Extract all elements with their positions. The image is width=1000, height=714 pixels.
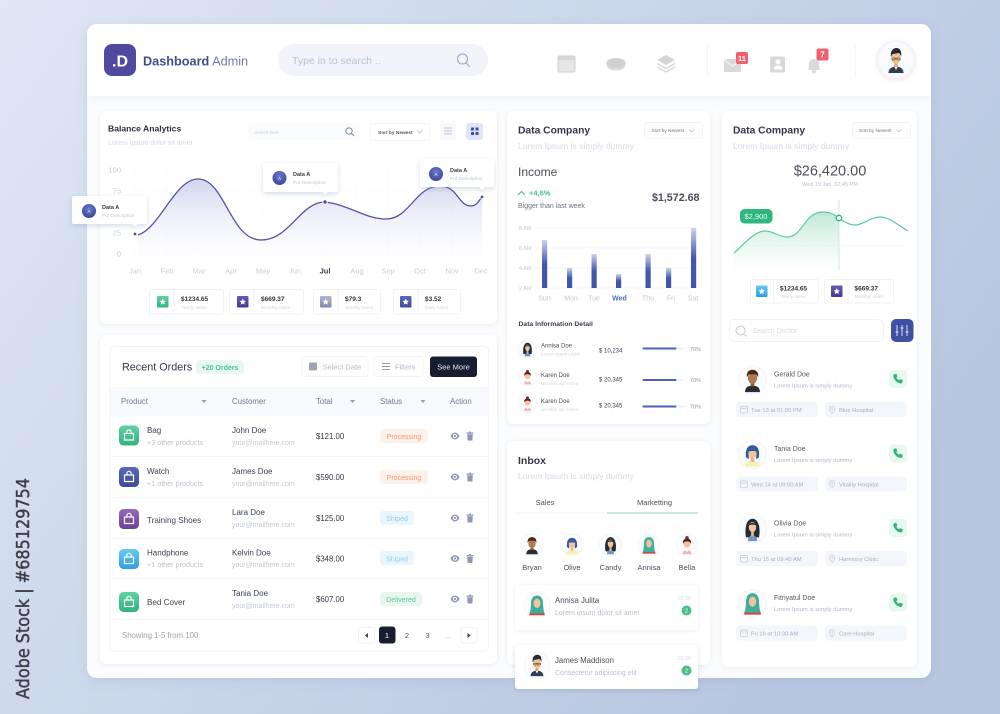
contact: Olive: Olive bbox=[563, 563, 581, 572]
x axis labels: Oct bbox=[414, 266, 427, 276]
tooltip: middle bbox=[263, 163, 338, 195]
icon: contact bbox=[770, 56, 785, 72]
bar chart: Tue bbox=[588, 296, 600, 302]
search bar: Type in to search .. bbox=[292, 55, 381, 67]
message: Annisa Julita: Lorem ipsum dolor sit amet bbox=[555, 610, 639, 617]
icon: mail with badge bbox=[724, 52, 748, 72]
green line chart bbox=[734, 200, 908, 270]
total amount: $26,420.00 bbox=[794, 164, 866, 180]
bar chart: Mon bbox=[564, 296, 578, 302]
table header: Product bbox=[121, 397, 149, 406]
contact: Candy: Candy bbox=[600, 563, 622, 572]
y axis labels: 25 bbox=[113, 228, 121, 238]
x axis labels: Feb bbox=[161, 266, 173, 276]
message: James Maddison: Consectetur adipiscing elit bbox=[555, 670, 637, 677]
income amount: $1,572.68 bbox=[652, 192, 700, 204]
doctor: Fitriyatul Doe bbox=[736, 590, 907, 640]
x axis labels: Aug bbox=[350, 266, 364, 276]
doctor: Fitriyatul Doe: Fitriyatul Doe bbox=[774, 595, 815, 602]
panel: income bbox=[507, 111, 710, 424]
doctor: Tania Doe: Lorem Ipsum is simply dummy bbox=[774, 458, 852, 464]
orders badge bbox=[196, 360, 244, 374]
stat chip: monthly sales: $669.37 bbox=[854, 286, 878, 292]
growth figure bbox=[518, 188, 551, 198]
row: bag: Processing bbox=[387, 434, 421, 441]
doctor: Gerald Doe: Tue 13 at 01:00 PM bbox=[751, 408, 802, 414]
logo: .D bbox=[112, 54, 128, 70]
row: training shoes: $125.00 bbox=[316, 514, 345, 523]
sort dropdown bbox=[370, 124, 430, 140]
row: watch bbox=[119, 467, 474, 488]
search bar bbox=[278, 44, 488, 76]
income label: Income bbox=[518, 165, 558, 179]
select date button: Select Date bbox=[322, 362, 361, 372]
x axis labels: Sep bbox=[381, 266, 395, 276]
y axis labels bbox=[108, 166, 121, 258]
message: Annisa Julita: 10:30 bbox=[677, 596, 691, 602]
doctor: Gerald Doe: Lorem Ipsum is simply dummy bbox=[774, 384, 852, 390]
user avatar bbox=[877, 41, 915, 79]
contact: Bryan bbox=[521, 534, 543, 572]
heading: Data Company bbox=[733, 126, 805, 136]
stat chip: weekly sales bbox=[314, 290, 380, 314]
detail row: Karen Doe second: $ 20,345 bbox=[599, 404, 623, 410]
doctor search: Search Doctor bbox=[752, 328, 798, 335]
icon: mail with badge: 11 bbox=[738, 54, 746, 63]
icon: bell with badge: 7 bbox=[820, 50, 825, 60]
doctor: Gerald Doe: Blue Hospital bbox=[839, 408, 873, 414]
contact: Annisa bbox=[638, 534, 661, 572]
tooltip: left bbox=[72, 196, 147, 227]
subheading: Lorem Ipsum is simply dummy bbox=[518, 141, 635, 151]
y axis labels: 100 bbox=[108, 166, 121, 174]
x axis labels: Nov bbox=[445, 266, 459, 276]
detail row: Karen Doe second: 70% bbox=[690, 404, 701, 410]
row: watch: $590.00 bbox=[316, 473, 345, 482]
row: training shoes bbox=[119, 508, 474, 529]
doctor: Gerald Doe bbox=[736, 366, 907, 417]
doctor: Tania Doe: Vitality Hospital bbox=[839, 482, 879, 488]
bar chart: 4 AM bbox=[519, 266, 532, 272]
row: bed cover: Bed Cover bbox=[147, 598, 186, 607]
row: handphone: Kelvin Doe bbox=[232, 548, 271, 558]
tabs: Sales bbox=[536, 498, 555, 507]
message: James Maddison: 10:30 bbox=[677, 656, 691, 662]
doctor: Tania Doe: Wed 14 at 09:00 AM bbox=[751, 482, 804, 488]
filters button bbox=[374, 356, 423, 376]
icon: layers bbox=[657, 55, 675, 72]
see more button: See More bbox=[437, 362, 470, 372]
tooltip: middle: Put Description bbox=[293, 180, 326, 186]
row: training shoes: your@mailhere.com bbox=[232, 522, 295, 529]
bar chart: Sat bbox=[688, 296, 698, 302]
doctor: Olivia Doe: Lorem Ipsum is simply dummy bbox=[774, 532, 852, 538]
stat chip: yearly sales: $1234.65 bbox=[181, 296, 208, 303]
pagination: 3 bbox=[425, 631, 430, 640]
x axis labels: Dec bbox=[474, 266, 488, 276]
bar chart: Thu bbox=[642, 296, 654, 302]
heading: Recent Orders bbox=[122, 362, 193, 374]
subheading: Lorem Ipsum is simply dummy bbox=[733, 141, 850, 151]
x axis labels: Jan bbox=[129, 266, 141, 276]
row: training shoes: Training Shoes bbox=[147, 516, 201, 525]
panel: inbox bbox=[507, 441, 710, 689]
y axis labels: 0 bbox=[117, 250, 121, 258]
see more button bbox=[430, 356, 477, 377]
row: handphone: Shiped bbox=[386, 556, 408, 564]
contact: Bella bbox=[676, 534, 698, 572]
row: handphone: $348.00 bbox=[316, 554, 345, 564]
search field: Search here... bbox=[254, 130, 282, 135]
logo bbox=[104, 44, 136, 76]
x axis labels: Apr bbox=[225, 266, 237, 276]
doctor: Tania Doe: Tania Doe bbox=[774, 446, 806, 453]
message: James Maddison: 2 bbox=[685, 668, 688, 674]
header bar bbox=[87, 24, 931, 96]
doctor: Tania Doe bbox=[736, 440, 907, 492]
tabs bbox=[515, 498, 698, 513]
filter button bbox=[891, 319, 914, 342]
contact: Bella: Bella bbox=[679, 563, 696, 572]
tooltip: left: Put Description bbox=[102, 213, 135, 219]
table header bbox=[110, 387, 488, 416]
sort dropdown bbox=[644, 122, 702, 138]
doctor: Fitriyatul Doe: Care Hospital bbox=[839, 632, 874, 638]
contact: Annisa: Annisa bbox=[638, 563, 661, 572]
stat chip: weekly sales: Weekly sales bbox=[345, 305, 374, 311]
comparison note: Bigger than last week bbox=[518, 203, 585, 210]
x axis labels bbox=[129, 266, 488, 276]
bar chart: Fri bbox=[667, 296, 676, 302]
search field bbox=[248, 123, 360, 140]
y axis labels: 75 bbox=[113, 186, 121, 196]
contact: Bryan: Bryan bbox=[522, 563, 542, 572]
list view toggle bbox=[440, 123, 456, 140]
panel: balance analytics bbox=[72, 111, 497, 324]
stat chip: monthly sales: Monthly sales bbox=[854, 294, 884, 300]
row: training shoes: Shiped bbox=[386, 516, 408, 523]
row: bed cover bbox=[119, 589, 474, 612]
row: handphone: +1 other products bbox=[147, 560, 204, 569]
detail row: Karen Doe second: Ut enim ad minim bbox=[541, 407, 578, 413]
stat chip: monthly sales bbox=[230, 290, 304, 314]
table header: Total bbox=[316, 397, 333, 406]
stat chip: yearly sales bbox=[150, 290, 224, 314]
area fill bbox=[138, 179, 482, 256]
message: Annisa Julita: Annisa Julita bbox=[555, 596, 600, 605]
x axis labels: May bbox=[256, 266, 270, 276]
doctor: Olivia Doe: Thu 15 at 09:40 AM bbox=[751, 557, 802, 563]
tooltip: middle: Data A bbox=[293, 172, 310, 178]
detail row: Karen Doe second bbox=[518, 394, 701, 413]
detail row: Annisa Doe: Lorem ipsum dolor bbox=[541, 352, 581, 358]
row: handphone: Handphone bbox=[147, 548, 189, 558]
stat chip: monthly sales: Monthly sales bbox=[261, 305, 291, 311]
value tag bbox=[740, 209, 772, 224]
filters button: Filters bbox=[395, 362, 416, 372]
stat chip: monthly sales bbox=[824, 280, 894, 303]
doctor search bbox=[730, 320, 884, 342]
detail row: Karen Doe: Ut enim ad minim bbox=[541, 381, 578, 387]
orders badge: +20 Orders bbox=[202, 365, 238, 372]
row: bed cover: your@mailhere.com bbox=[232, 603, 295, 610]
contact: Olive bbox=[561, 534, 583, 572]
tooltip: right bbox=[420, 159, 494, 190]
detail row: Karen Doe bbox=[518, 368, 701, 387]
detail heading: Data Information Detail bbox=[518, 321, 593, 328]
data points bbox=[133, 195, 484, 236]
row: watch: +1 other products bbox=[147, 479, 204, 488]
sort dropdown: Sort by Newest bbox=[859, 128, 892, 134]
heading: Inbox bbox=[518, 455, 546, 467]
detail row: Karen Doe: 70% bbox=[690, 378, 701, 384]
detail row: Karen Doe: Karen Doe bbox=[541, 373, 570, 379]
doctor: Fitriyatul Doe: Fri 16 at 10:30 AM bbox=[751, 632, 799, 638]
tabs: Marketting bbox=[637, 498, 672, 507]
bar chart bbox=[519, 226, 698, 302]
row: bag: $121.00 bbox=[316, 432, 345, 441]
doctor: Olivia Doe: Harmony Clinic bbox=[839, 557, 878, 563]
tooltip: right: A bbox=[434, 172, 438, 177]
row: bed cover: Delivered bbox=[386, 597, 416, 604]
tooltip: middle: A bbox=[278, 176, 281, 181]
row: handphone bbox=[119, 548, 474, 569]
stat chip: yearly sales: $1234.65 bbox=[780, 286, 807, 292]
x axis labels: Jun bbox=[289, 266, 301, 276]
table header: Action bbox=[450, 397, 472, 406]
bar chart: Wed bbox=[612, 296, 627, 302]
stat chip: daily sales bbox=[394, 290, 460, 314]
pagination: 1 bbox=[385, 631, 389, 640]
sort dropdown: Sort by Newest bbox=[652, 128, 685, 134]
side credit text: Adobe Stock | #685129754 bbox=[14, 478, 34, 699]
select date button bbox=[302, 356, 368, 376]
heading: Data Company bbox=[518, 126, 590, 136]
stat chip: weekly sales: $79.3 bbox=[345, 296, 362, 303]
bar chart: 8 AM bbox=[519, 226, 532, 232]
table header: Status bbox=[380, 397, 402, 406]
table footer text: Showing 1-5 from 100 bbox=[122, 631, 199, 640]
row: handphone: your@mailhere.com bbox=[232, 562, 295, 569]
bar chart: 6 AM bbox=[519, 246, 532, 252]
line series bbox=[138, 179, 482, 240]
bar chart: 2 AM bbox=[519, 286, 532, 292]
detail row: Karen Doe second: Karen Doe bbox=[541, 399, 570, 405]
row: watch: your@mailhere.com bbox=[232, 481, 295, 488]
detail row: Annisa Doe: 70% bbox=[690, 347, 701, 353]
doctor: Gerald Doe: Gerald Doe bbox=[774, 372, 810, 378]
tooltip: right: Put Description bbox=[450, 176, 483, 182]
message: James Maddison bbox=[515, 645, 698, 689]
row: watch: James Doe bbox=[232, 467, 273, 476]
heading: Balance Analytics bbox=[108, 124, 181, 134]
row: bag: Bag bbox=[147, 426, 161, 435]
tooltip: right: Data A bbox=[450, 168, 467, 174]
panel: doctors bbox=[722, 111, 917, 667]
bar chart: Sun bbox=[538, 296, 551, 302]
icon: bell with badge bbox=[807, 48, 828, 74]
row: bed cover: $607.00 bbox=[316, 595, 345, 604]
brand name: Dashboard Admin bbox=[143, 54, 248, 68]
subheading: Lorem ipsum dolor sit amet bbox=[108, 140, 192, 147]
stat chip: daily sales: Daily sales bbox=[425, 305, 449, 311]
stat chip: yearly sales: Yearly sales bbox=[780, 294, 806, 300]
row: bed cover: Tania Doe bbox=[232, 589, 269, 598]
icon: window bbox=[558, 56, 575, 72]
contact: Candy bbox=[600, 534, 622, 572]
line chart bbox=[108, 166, 488, 276]
message: Annisa Julita bbox=[515, 585, 698, 630]
sort dropdown: Sort by Newest bbox=[378, 130, 413, 136]
row: bag: John Doe bbox=[232, 426, 267, 435]
divider bbox=[708, 46, 856, 76]
tooltip: left: A bbox=[87, 209, 91, 214]
detail row: Annisa Doe bbox=[518, 340, 701, 358]
message: Annisa Julita: 2 bbox=[685, 608, 688, 614]
message: James Maddison: James Maddison bbox=[555, 656, 614, 665]
x axis labels: Mar bbox=[193, 266, 206, 276]
pagination: ... bbox=[445, 631, 451, 640]
pagination: 2 bbox=[405, 631, 409, 640]
row: bag: your@mailhere.com bbox=[232, 440, 295, 447]
row: watch: Watch bbox=[147, 467, 169, 476]
growth figure: +4,6% bbox=[529, 188, 551, 198]
subheading: Lorem Ipsum is simply dummy bbox=[518, 471, 635, 481]
detail row: Karen Doe: $ 20,345 bbox=[599, 378, 623, 384]
panel: recent orders bbox=[100, 335, 497, 664]
row: training shoes: Lara Doe bbox=[232, 508, 265, 517]
value tag: $2,900 bbox=[745, 212, 767, 221]
detail row: Annisa Doe: $ 10,234 bbox=[599, 348, 623, 354]
date: Wed 19 Jan, 02:45 PM bbox=[802, 182, 858, 188]
row: bag bbox=[119, 426, 474, 447]
pagination bbox=[358, 626, 477, 644]
x axis labels: Jul bbox=[320, 266, 330, 276]
stat chip: yearly sales bbox=[750, 280, 818, 303]
doctor: Fitriyatul Doe: Lorem Ipsum is simply dummy bbox=[774, 607, 852, 613]
row: bag: +3 other products bbox=[147, 438, 204, 447]
grid view toggle bbox=[466, 123, 483, 140]
table header: Customer bbox=[232, 397, 266, 406]
detail row: Annisa Doe: Annisa Doe bbox=[541, 344, 573, 350]
icon: coin bbox=[606, 58, 626, 70]
stat chip: daily sales: $3.52 bbox=[425, 296, 442, 303]
tooltip: left: Data A bbox=[102, 205, 119, 211]
row: watch: Processing bbox=[387, 475, 421, 482]
stat chip: monthly sales: $669.37 bbox=[261, 296, 285, 303]
doctor: Olivia Doe bbox=[736, 515, 907, 566]
sort dropdown bbox=[852, 122, 910, 138]
stat chip: yearly sales: Yearly sales bbox=[181, 305, 207, 311]
doctor: Olivia Doe: Olivia Doe bbox=[774, 520, 806, 528]
y axis labels: 50 bbox=[113, 208, 121, 216]
